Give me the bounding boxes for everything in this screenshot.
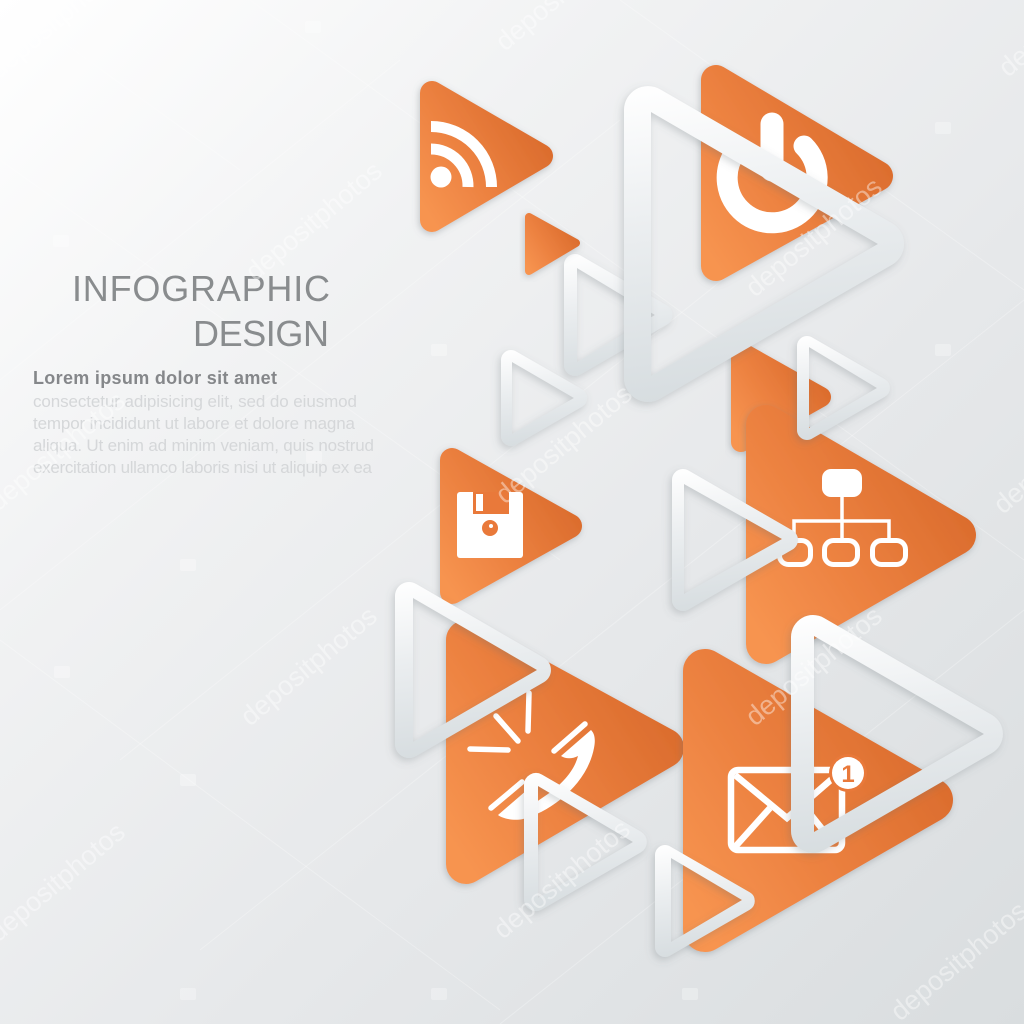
description body: tempor incididunt ut labore et dolore magna xyxy=(33,414,356,433)
triangle: network xyxy=(766,425,956,644)
icon: mail with badge: 1 xyxy=(841,761,855,788)
triangle: mail xyxy=(705,671,931,930)
icon: ringing phone xyxy=(470,693,595,820)
icon: power xyxy=(727,124,817,223)
triangle body xyxy=(466,640,664,864)
ring: left xyxy=(395,582,551,758)
triangle: save xyxy=(452,460,570,592)
ring: middle xyxy=(672,469,798,611)
triangle body xyxy=(452,460,570,592)
icon: floppy disk xyxy=(457,492,523,558)
triangle body xyxy=(716,80,878,266)
ring: small left xyxy=(501,350,587,446)
description body: exercitation ullamco laboris nisi ut aliquip ex ea xyxy=(33,458,373,477)
description body: consectetur adipisicing elit, sed do eiusmod xyxy=(33,392,357,411)
triangle: small arrow xyxy=(529,217,576,271)
icon: mail with badge xyxy=(731,754,867,850)
description heading: Lorem ipsum dolor sit amet xyxy=(33,368,277,388)
description body: aliqua. Ut enim ad minim veniam, quis nostrud xyxy=(33,436,374,455)
triangle: power xyxy=(716,80,878,266)
triangle: behind network xyxy=(741,352,821,442)
title: INFOGRAPHIC xyxy=(72,268,330,309)
title: DESIGN xyxy=(193,313,329,354)
watermark: depositphotos xyxy=(240,156,388,287)
ring: upper right small xyxy=(797,336,890,440)
ring: back small upper xyxy=(564,254,672,376)
ring: lower phone xyxy=(524,773,647,911)
watermark: depositphotos xyxy=(740,172,888,303)
icon: network hierarchy xyxy=(780,469,906,564)
watermark: depositphotos xyxy=(490,379,638,510)
triangle body xyxy=(432,93,541,220)
ring: mail overlay xyxy=(791,615,1003,853)
ring: bottom xyxy=(655,845,755,957)
ring: large xyxy=(624,86,904,402)
watermark: depositphotos xyxy=(740,601,888,732)
text block: description xyxy=(33,368,374,477)
triangle: phone xyxy=(466,640,664,864)
watermark: depositphotos xyxy=(235,601,383,732)
watermark: depositphotos xyxy=(488,814,636,945)
title xyxy=(72,268,330,354)
description body xyxy=(33,392,374,477)
triangle body xyxy=(705,671,931,930)
icon: RSS feed xyxy=(430,126,492,188)
triangle body xyxy=(766,425,956,644)
triangle: RSS xyxy=(430,93,541,220)
